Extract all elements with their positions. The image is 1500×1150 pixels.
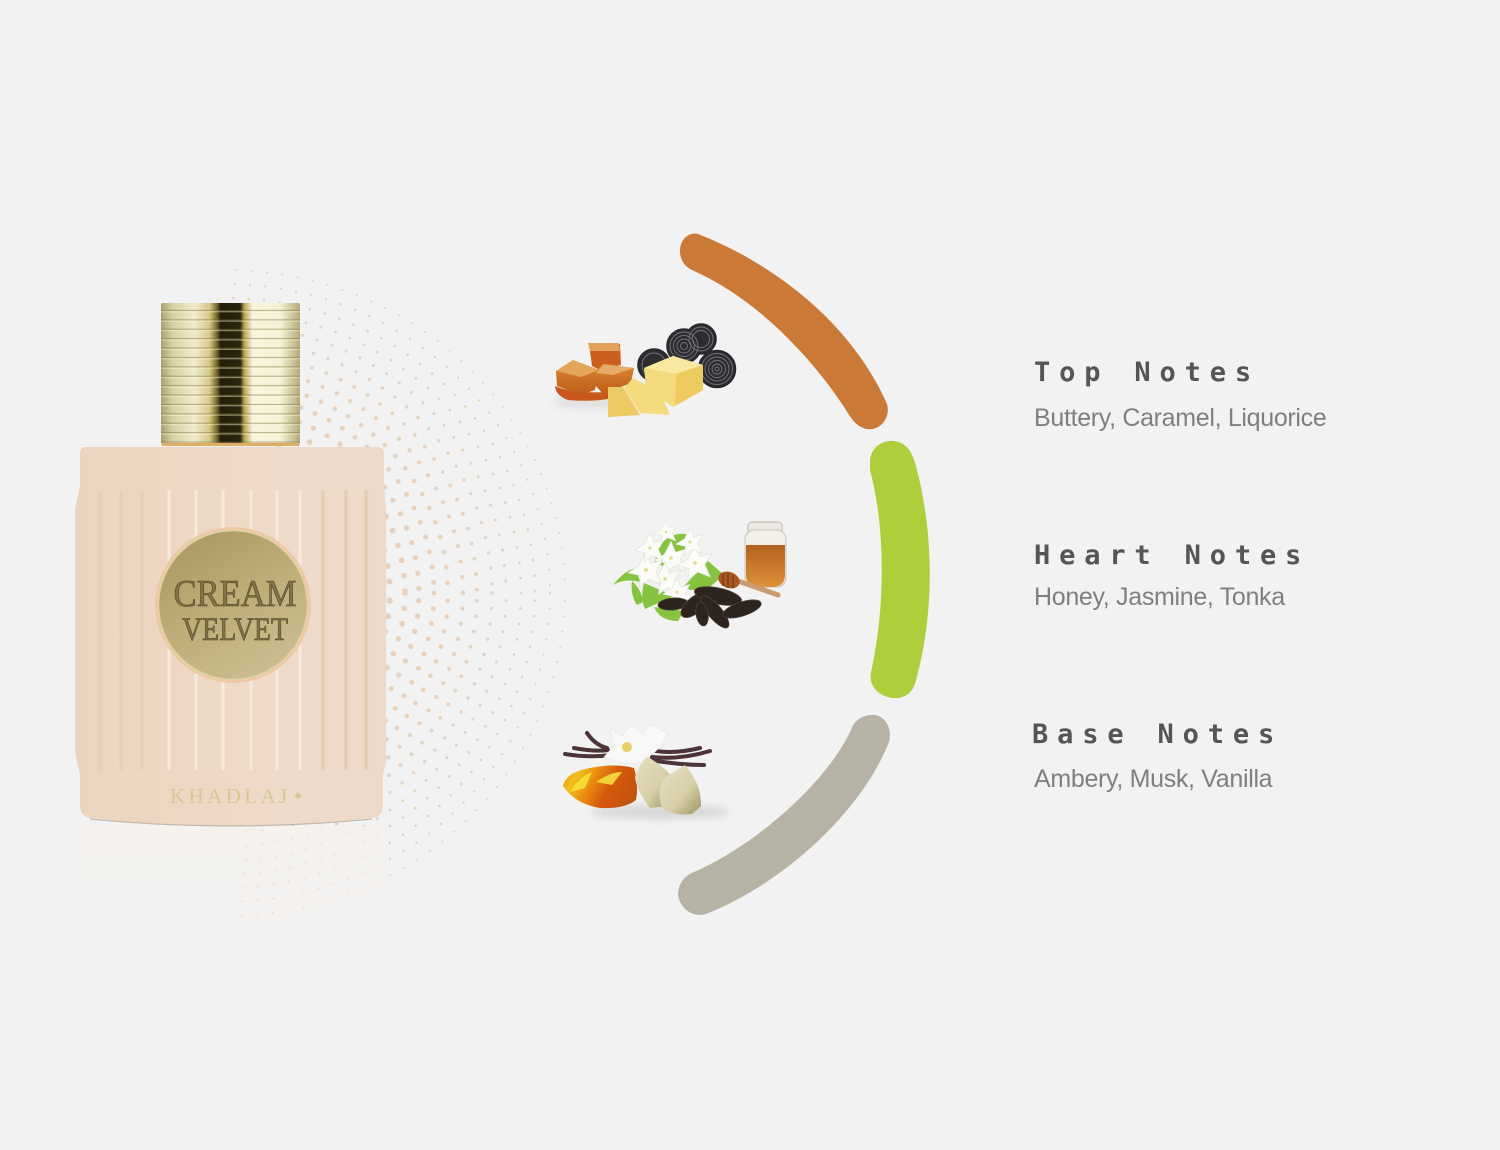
text block: heart notes: [1034, 540, 1310, 611]
CREAM VELVET: VELVET: [182, 612, 288, 648]
bottle cap: [161, 303, 300, 446]
jasmine leaves: [613, 534, 724, 621]
label medallion: [155, 527, 311, 683]
base notes ingredients: [563, 724, 730, 819]
top notes ingredients: [552, 324, 736, 417]
tonka beans: [658, 583, 763, 632]
scale arc: heart: [870, 441, 930, 698]
heading: heart notes: Heart Notes: [1034, 540, 1310, 571]
list: heart notes: Honey, Jasmine, Tonka: [1034, 583, 1285, 611]
white flower: [604, 724, 668, 764]
caramel: [555, 343, 634, 401]
musk seeds: [635, 757, 701, 814]
honey dipper: [716, 569, 778, 595]
amber stone: [563, 766, 637, 808]
heart notes ingredients: [613, 520, 786, 632]
text block: top notes: [1034, 357, 1326, 432]
scale arc: base: [678, 715, 890, 915]
brand diamond: [294, 792, 302, 799]
bottle ribs: [100, 490, 366, 770]
text block: base notes: [1032, 719, 1283, 793]
jasmine flowers: [628, 520, 712, 605]
list: top notes: Buttery, Caramel, Liquorice: [1034, 404, 1326, 432]
bottle reflection: [76, 826, 386, 976]
dot halo: [232, 269, 566, 916]
honey jar: [745, 522, 786, 587]
scale arc: top: [680, 234, 888, 429]
CREAM VELVET: CREAM: [174, 573, 296, 615]
heading: base notes: Base Notes: [1032, 719, 1283, 750]
brand name: KHADLAJ: [170, 784, 291, 808]
list: base notes: Ambery, Musk, Vanilla: [1034, 765, 1272, 793]
butter: [608, 356, 703, 417]
bottle body: [75, 447, 386, 826]
CREAM VELVET: [174, 573, 296, 648]
vanilla pods: [565, 733, 710, 765]
heading: top notes: Top Notes: [1034, 357, 1260, 388]
perfume bottle: [75, 303, 386, 826]
liquorice: [638, 324, 736, 388]
